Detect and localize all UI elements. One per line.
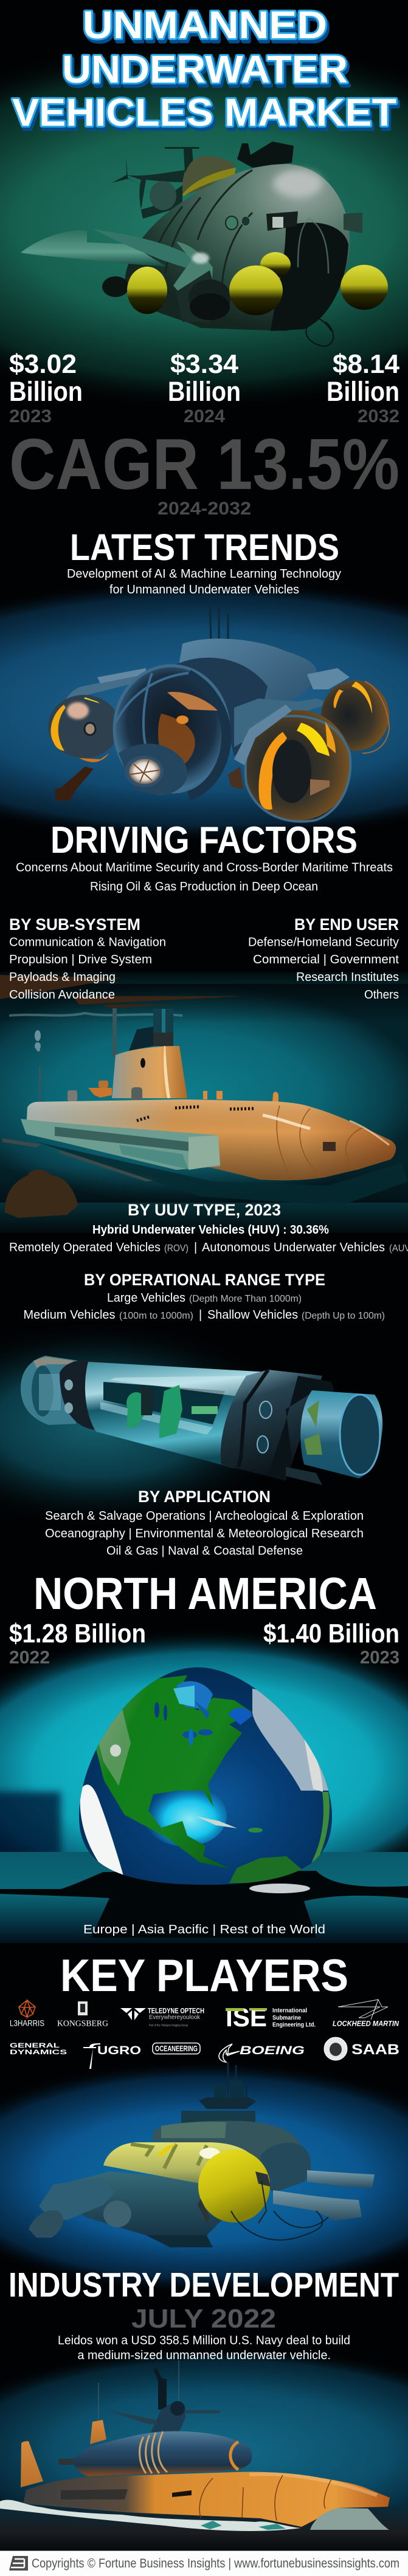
heading: north america: NORTH AMERICA bbox=[33, 1568, 377, 1619]
by sub-system list: BY SUB-SYSTEM bbox=[9, 915, 140, 934]
surface foam bbox=[9, 1013, 182, 1016]
panel: by application bbox=[45, 1488, 364, 1557]
illustration: orange-lit bathysphere robot bbox=[48, 598, 389, 821]
heading: driving factors: DRIVING FACTORS bbox=[50, 819, 358, 861]
water shadow and ripples bbox=[0, 1871, 408, 1938]
hero background glow bbox=[0, 36, 408, 413]
stat 2022: 2022 bbox=[9, 1647, 50, 1668]
logo: Boeing bbox=[219, 2044, 305, 2062]
stat 2032 bbox=[327, 349, 400, 426]
trend text: Development of AI & Machine Learning Technology bbox=[67, 567, 341, 581]
heading: by application: BY APPLICATION bbox=[138, 1488, 271, 1506]
ripple highlight bbox=[249, 1884, 310, 1893]
driver text: Rising Oil & Gas Production in Deep Ocean bbox=[90, 880, 318, 893]
by sub-system list bbox=[9, 915, 166, 1002]
stat 2024 bbox=[168, 349, 241, 426]
title bbox=[12, 3, 398, 137]
footer strip bbox=[0, 2551, 408, 2576]
logo: Teledyne Optech: Part of the Teledyne Imaging Group bbox=[149, 2024, 188, 2028]
panel: latest trends bbox=[0, 527, 408, 844]
by end user list: Research Institutes bbox=[296, 971, 399, 984]
panel: market size stats bbox=[9, 349, 400, 519]
panel: industry development bbox=[0, 2266, 408, 2557]
logo: Teledyne Optech: Everywhereyoulook bbox=[149, 2014, 201, 2021]
logo: Saab: SAAB bbox=[351, 2041, 399, 2058]
logo: Kongsberg: KONGSBERG bbox=[57, 2019, 108, 2029]
development text: a medium-sized unmanned underwater vehicle. bbox=[78, 2349, 331, 2362]
by operational range type bbox=[23, 1271, 385, 1322]
logo: Fugro bbox=[83, 2043, 141, 2069]
by operational range type: (Depth Up to 100m) bbox=[302, 1311, 385, 1321]
by sub-system list: Propulsion | Drive System bbox=[9, 953, 152, 966]
panel: driving factors bbox=[16, 819, 393, 893]
stat 2024: Billion bbox=[168, 376, 241, 407]
logo: ISE: International bbox=[272, 2007, 307, 2014]
logo: L3Harris bbox=[10, 2000, 44, 2028]
footer bbox=[0, 2551, 408, 2576]
illustration: glass tube vehicle bbox=[21, 1356, 382, 1485]
stat 2023 bbox=[263, 1619, 399, 1668]
illustration: orange submarine with torpedo bbox=[0, 2360, 390, 2531]
by sub-system list: Payloads & Imaging bbox=[9, 971, 116, 984]
title: UNDERWATER bbox=[64, 50, 350, 94]
logo: Boeing: BOEING bbox=[240, 2045, 305, 2057]
by operational range type: | bbox=[199, 1308, 202, 1322]
development text bbox=[58, 2334, 350, 2362]
driver text: Concerns About Maritime Security and Cross-Border Maritime Threats bbox=[16, 861, 393, 875]
date: JULY 2022 bbox=[131, 2304, 276, 2334]
CAGR period: 2024-2032 bbox=[157, 499, 251, 519]
stat 2023: 2023 bbox=[9, 406, 52, 426]
logo: Teledyne Optech: TELEDYNE OPTECH bbox=[148, 2008, 204, 2015]
by operational range type: BY OPERATIONAL RANGE TYPE bbox=[84, 1271, 325, 1289]
by operational range type: (100m to 1000m) bbox=[119, 1311, 193, 1321]
stat 2024: $3.34 bbox=[170, 349, 239, 379]
panel: yellow vehicle illustration bbox=[0, 2059, 408, 2296]
illustration: yellow underwater vehicle bbox=[29, 2062, 375, 2247]
panel: key players bbox=[10, 1950, 399, 2069]
logo: Lockheed Martin bbox=[333, 2000, 399, 2028]
by uuv type: Remotely Operated Vehicles bbox=[9, 1241, 161, 1254]
logo: Fugro: UGRO bbox=[97, 2045, 141, 2057]
stat 2032: Billion bbox=[327, 376, 399, 407]
by end user list bbox=[248, 915, 399, 1002]
yellow vehicle background glow bbox=[0, 2059, 408, 2296]
by uuv type: BY UUV TYPE, 2023 bbox=[128, 1201, 281, 1219]
dark navy lower left bbox=[0, 1792, 61, 1859]
coral bbox=[5, 1170, 78, 1218]
by operational range type: (Depth More Than 1000m) bbox=[189, 1294, 302, 1304]
logo: L3Harris: L3HARRIS bbox=[10, 2018, 44, 2028]
by end user list: BY END USER bbox=[294, 915, 399, 934]
logo: General Dynamics bbox=[10, 2042, 67, 2056]
logo: ISE: Submarine bbox=[272, 2014, 301, 2021]
application list: Search & Salvage Operations | Archeological & Exploration bbox=[45, 1509, 364, 1523]
tube background glow bbox=[0, 1318, 304, 1531]
driver text bbox=[16, 861, 393, 893]
stat 2022: $1.28 Billion bbox=[9, 1619, 146, 1648]
by operational range type: Shallow Vehicles bbox=[207, 1308, 298, 1322]
brown surface streaks bbox=[0, 975, 243, 1008]
by end user list: Others bbox=[364, 988, 399, 1002]
trend text bbox=[67, 567, 341, 596]
application list: Oil & Gas | Naval & Coastal Defense bbox=[106, 1544, 303, 1557]
logo: Lockheed Martin: LOCKHEED MARTIN bbox=[333, 2019, 399, 2028]
stat 2032: 2032 bbox=[358, 406, 399, 426]
logo: General Dynamics: DYNAMICS bbox=[10, 2049, 67, 2056]
illustration: orange submarine bbox=[2, 1008, 408, 1206]
other regions: Europe | Asia Pacific | Rest of the World bbox=[83, 1923, 325, 1936]
by sub-system list: Communication & Navigation bbox=[9, 935, 166, 949]
panel: segment lists bbox=[9, 915, 408, 1322]
lower vehicle background glow bbox=[0, 2345, 408, 2557]
application list: Oceanography | Environmental & Meteorological Research bbox=[45, 1527, 364, 1540]
logo: ISE: Engineering Ltd. bbox=[272, 2021, 316, 2029]
logo: Oceaneering bbox=[153, 2043, 200, 2054]
logo: Saab bbox=[324, 2037, 399, 2060]
by end user list: Defense/Homeland Security bbox=[248, 935, 399, 949]
water surface bbox=[0, 1852, 408, 1943]
application list bbox=[45, 1509, 364, 1557]
by operational range type: Large Vehicles bbox=[107, 1291, 185, 1305]
globe background glow bbox=[0, 1628, 408, 1907]
title: UNMANNED bbox=[83, 3, 327, 47]
panel: uuv type illustration bbox=[0, 966, 408, 1239]
logo: Teledyne Optech bbox=[120, 2008, 204, 2028]
title: UNMANNED bbox=[85, 6, 329, 50]
logo: Kongsberg bbox=[57, 2001, 108, 2029]
stat 2023: $3.02 bbox=[9, 349, 77, 379]
floor and fade bbox=[0, 1166, 408, 1239]
stat 2024: 2024 bbox=[184, 406, 225, 426]
globe bbox=[73, 1664, 341, 1889]
by sub-system list: Collision Avoidance bbox=[9, 988, 115, 1002]
logo: ISE: ISE bbox=[226, 2003, 267, 2032]
logo: Oceaneering: OCEANEERING bbox=[155, 2044, 198, 2053]
title: VEHICLES MARKET bbox=[14, 94, 398, 137]
orange submarine background bbox=[0, 972, 408, 1233]
by uuv type: | bbox=[194, 1241, 197, 1254]
illustration: teal underwater vehicle bbox=[21, 142, 388, 346]
title: VEHICLES MARKET bbox=[12, 91, 396, 134]
heading: key players: KEY PLAYERS bbox=[60, 1950, 348, 2001]
by operational range type: Medium Vehicles bbox=[23, 1308, 116, 1322]
logo: Fortune Business Insights bbox=[9, 2556, 28, 2571]
stat 2032: $8.14 bbox=[333, 349, 400, 379]
panel: tube vehicle illustration bbox=[0, 1318, 382, 1531]
robot background glow bbox=[0, 577, 408, 844]
development text: Leidos won a USD 358.5 Million U.S. Navy deal to build bbox=[58, 2334, 350, 2347]
trend text: for Unmanned Underwater Vehicles bbox=[109, 583, 299, 596]
bubbles bbox=[35, 1030, 41, 1051]
stat 2022 bbox=[9, 1619, 146, 1668]
title: UNDERWATER bbox=[62, 47, 348, 91]
top dark surface band bbox=[0, 966, 408, 1023]
by uuv type bbox=[9, 1201, 408, 1254]
by end user list: Commercial | Government bbox=[253, 953, 399, 966]
stat 2023 bbox=[9, 349, 83, 426]
heading: latest trends: LATEST TRENDS bbox=[70, 527, 339, 568]
panel: north america bbox=[0, 1568, 408, 1943]
water bbox=[0, 2506, 408, 2551]
panel: hero bbox=[0, 3, 408, 413]
by uuv type: (ROV) bbox=[164, 1243, 188, 1254]
by uuv type: Autonomous Underwater Vehicles bbox=[202, 1241, 385, 1254]
logo: ISE bbox=[226, 2003, 316, 2032]
stat 2023: Billion bbox=[9, 376, 83, 407]
logo: General Dynamics: GENERAL bbox=[10, 2042, 60, 2049]
by uuv type: Hybrid Underwater Vehicles (HUV) : 30.36% bbox=[92, 1223, 329, 1237]
glow bbox=[0, 984, 408, 1203]
stat 2023: 2023 bbox=[360, 1647, 399, 1668]
